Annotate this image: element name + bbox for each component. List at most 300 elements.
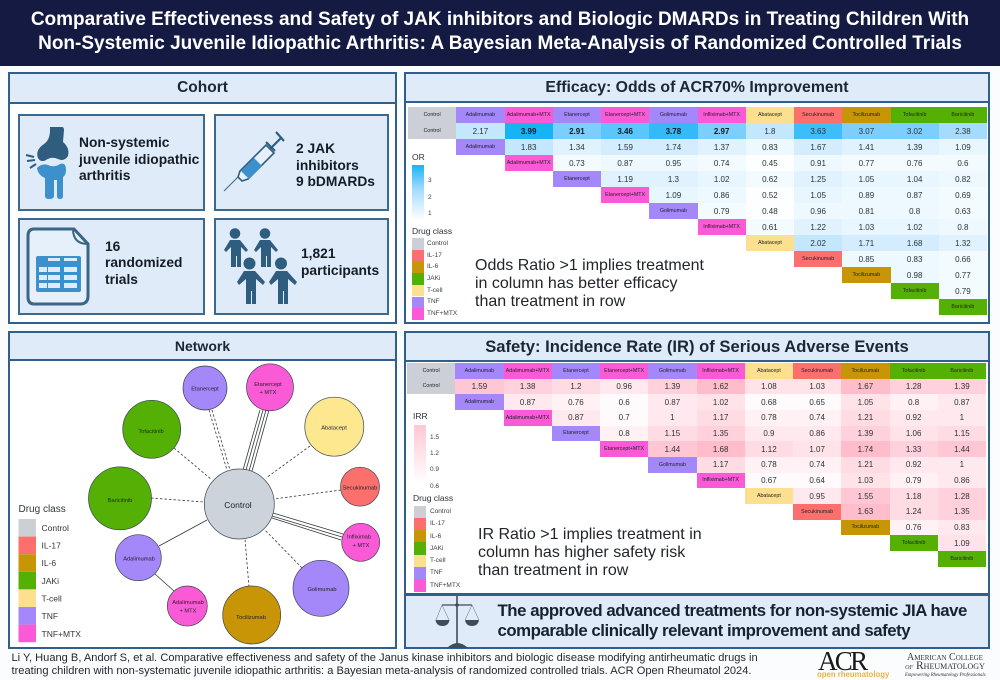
node: etanercept + MTX <box>246 364 294 411</box>
safety league table: 0.74 <box>809 460 825 469</box>
efficacy league table: 1.34 <box>569 142 585 152</box>
efficacy league table: 0.6 <box>957 158 968 168</box>
safety league table: 1.21 <box>858 413 873 422</box>
safety league table: 1.28 <box>954 492 970 501</box>
logo: ACR Open Rheumatology <box>817 646 890 679</box>
node: etanercept <box>183 366 227 410</box>
panel: safety <box>404 331 990 595</box>
safety league table: 1.17 <box>713 413 728 422</box>
safety league table: Baricitinib <box>950 556 973 562</box>
efficacy league table: 1.03 <box>859 222 874 232</box>
legend: network drug class: IL-6 <box>42 558 56 568</box>
efficacy league table: 2.38 <box>955 126 971 136</box>
safety league table: Tofacitinib <box>902 368 925 374</box>
efficacy league table: Etanercept+MTX <box>605 112 645 118</box>
efficacy league table: 0.89 <box>859 190 874 200</box>
efficacy league table: Infliximab+MTX <box>703 224 740 230</box>
node: infliximab + MTX: Infliximab <box>347 534 371 540</box>
label: participants: 1,821 <box>301 246 336 261</box>
conclusion text: comparable clinically relevant improvement and safety <box>498 620 910 640</box>
safety league table: 0.87 <box>568 413 584 422</box>
safety league table: 0.68 <box>761 398 777 407</box>
efficacy league table: 1.59 <box>617 142 633 152</box>
efficacy league table: Tocilizumab <box>853 272 880 278</box>
safety league table: 1 <box>960 460 964 469</box>
safety league table: 1.24 <box>906 507 921 516</box>
safety league table: Golimumab <box>659 368 686 374</box>
edges <box>151 410 343 591</box>
efficacy league table: Golimumab <box>660 112 687 118</box>
safety league table: 1.39 <box>665 382 680 391</box>
node: secukinumab <box>340 467 380 506</box>
efficacy league table: 0.77 <box>859 158 874 168</box>
safety league table: 0.9 <box>763 429 774 438</box>
heading: cohort <box>10 74 395 104</box>
efficacy league table: Baricitinib <box>951 112 974 118</box>
logo: American College of Rheumatology: Empowering Rheumatology Professionals <box>905 672 986 678</box>
note: odds ratio: Odds Ratio >1 implies treatment <box>475 257 704 274</box>
label: drugs <box>296 141 375 189</box>
note: IR ratio: than treatment in row <box>478 562 628 579</box>
icon: syringe <box>224 131 285 192</box>
label: participants: participants <box>301 263 379 278</box>
safety league table: Adalimumab <box>465 399 494 405</box>
legend: OR colour scale: 1 <box>428 210 432 217</box>
safety league table: 1.05 <box>858 398 873 407</box>
safety league table: 1.21 <box>858 460 873 469</box>
efficacy league table: 1.09 <box>666 190 681 200</box>
heading: efficacy <box>406 74 988 103</box>
safety league table: 1.15 <box>665 429 680 438</box>
safety league table: 1.07 <box>809 445 825 454</box>
efficacy league table: 0.8 <box>909 206 920 216</box>
legend: efficacy drug class: Drug class <box>412 226 452 236</box>
efficacy league table: 0.8 <box>957 222 968 232</box>
logo: American College of Rheumatology: of Rheumatology <box>905 660 985 672</box>
efficacy league table: 0.62 <box>762 174 778 184</box>
efficacy league table: 2.97 <box>714 126 729 136</box>
safety league table: 1.2 <box>570 382 581 391</box>
citation: treating children with non-systematic juvenile idiopathic arthritis: a Bayesian meta-analysis of randomized controlled trials. ACR Open Rheumatol 2024. <box>12 665 751 677</box>
node: adalimumab: Adalimumab <box>123 556 155 562</box>
node: golimumab: Golimumab <box>307 587 337 593</box>
safety league table: 0.65 <box>809 398 825 407</box>
node: secukinumab: Secukinumab <box>343 486 377 492</box>
panel: cohort <box>8 72 397 324</box>
efficacy league table: 1.37 <box>714 142 729 152</box>
legend: safety drug class: TNF+MTX <box>430 582 460 588</box>
efficacy league table: 3.46 <box>617 126 633 136</box>
legend: safety drug class: JAKi <box>430 544 443 552</box>
efficacy league table: 0.95 <box>666 158 681 168</box>
efficacy league table: 2.02 <box>810 238 826 248</box>
conclusion text: The approved advanced treatments for non-systemic JIA have <box>498 601 967 620</box>
safety league table: 0.78 <box>761 460 777 469</box>
efficacy league table: Etanercept+MTX <box>605 192 645 198</box>
efficacy league table: Etanercept <box>564 112 590 118</box>
node: etanercept: Etanercept <box>191 386 219 392</box>
efficacy league table: 1.25 <box>810 174 826 184</box>
node: adalimumab + MTX: + MTX <box>180 608 197 614</box>
safety league table: 0.6 <box>619 398 630 407</box>
safety league table: 1.02 <box>713 398 728 407</box>
safety league table: 1.67 <box>858 382 873 391</box>
panel: network <box>8 331 397 649</box>
efficacy league table: 0.85 <box>859 254 874 264</box>
efficacy league table: Abatacept <box>758 112 782 118</box>
label: drugs: inhibitors <box>296 158 359 173</box>
panel: conclusion <box>404 594 990 649</box>
label: disease <box>78 135 199 183</box>
safety league table: Etanercept <box>563 430 589 436</box>
safety league table: 1.44 <box>954 445 970 454</box>
safety league table: 0.87 <box>665 398 680 407</box>
label: disease: juvenile idiopathic <box>79 152 199 167</box>
safety league table: 0.79 <box>906 476 921 485</box>
node: infliximab + MTX: + MTX <box>353 543 370 549</box>
icon: document table <box>26 228 90 306</box>
legend: efficacy drug class: IL-17 <box>427 252 442 258</box>
efficacy league table: 0.91 <box>810 158 826 168</box>
legend: network drug class: TNF <box>42 611 58 621</box>
efficacy league table: 0.73 <box>569 158 585 168</box>
legend: efficacy drug class: TNF+MTX <box>427 310 457 317</box>
safety league table: 1.44 <box>665 445 680 454</box>
heading: network: Network <box>175 338 230 354</box>
safety league table: 0.8 <box>619 429 630 438</box>
node: infliximab + MTX <box>342 523 380 561</box>
safety league table: 1.08 <box>761 382 777 391</box>
efficacy league table: 0.98 <box>907 270 922 280</box>
node: baricitinib: Baricitinib <box>108 498 132 504</box>
safety league table: Etanercept+MTX <box>604 368 644 374</box>
efficacy league table: 1.41 <box>859 142 874 152</box>
conclusion text <box>498 601 967 640</box>
efficacy league table: 0.63 <box>955 206 971 216</box>
efficacy league table <box>408 107 987 315</box>
note: IR ratio: IR Ratio >1 implies treatment in <box>478 526 702 543</box>
safety league table: 0.87 <box>520 398 535 407</box>
node: tofacitinib: Tofacitinib <box>138 429 164 435</box>
efficacy league table: Etanercept <box>564 176 590 182</box>
safety league table: 1 <box>960 413 964 422</box>
efficacy league table: 1.04 <box>907 174 922 184</box>
heading: safety <box>406 333 988 362</box>
safety league table: Tocilizumab <box>852 368 879 374</box>
citation <box>12 652 758 677</box>
legend: efficacy drug class: T-cell <box>427 286 443 294</box>
safety league table: 0.64 <box>809 476 825 485</box>
safety league table: 1.09 <box>954 539 970 548</box>
safety league table: 1.63 <box>858 507 873 516</box>
safety league table: Infliximab+MTX <box>702 368 739 374</box>
safety league table: 0.92 <box>906 460 921 469</box>
card: trials <box>18 218 205 315</box>
efficacy league table: 1.8 <box>764 126 775 136</box>
label: participants <box>301 246 379 278</box>
node: etanercept + MTX: Etanercept <box>254 382 282 388</box>
safety league table: Abatacept <box>757 493 781 499</box>
node: adalimumab + MTX <box>167 586 207 626</box>
safety league table: Secukinumab <box>801 509 833 515</box>
node: etanercept + MTX: + MTX <box>260 390 277 396</box>
efficacy league table: Abatacept <box>758 240 782 246</box>
efficacy league table: 1.3 <box>668 174 679 184</box>
efficacy league table: Baricitinib <box>951 304 974 310</box>
legend: OR colour scale <box>412 152 432 218</box>
node: tocilizumab <box>223 586 281 644</box>
legend: network drug class <box>18 504 81 642</box>
safety league table: 0.95 <box>809 492 825 501</box>
efficacy league table: 0.74 <box>714 158 729 168</box>
efficacy league table: 1.02 <box>714 174 729 184</box>
safety league table: Abatacept <box>757 368 781 374</box>
efficacy league table: 0.45 <box>762 158 778 168</box>
efficacy league table: Tofacitinib <box>903 112 926 118</box>
legend: network drug class: Control <box>42 523 69 533</box>
efficacy league table: 1.32 <box>955 238 971 248</box>
label: drugs: 2 JAK <box>296 141 335 156</box>
efficacy league table: 0.86 <box>714 190 729 200</box>
safety league table: 1.62 <box>713 382 728 391</box>
label: trials: 16 <box>105 238 120 254</box>
safety league table: 1.28 <box>906 382 921 391</box>
efficacy league table: 0.96 <box>810 206 826 216</box>
node: tocilizumab: Tocilizumab <box>236 615 266 621</box>
efficacy league table: 0.79 <box>714 206 729 216</box>
safety league table: Adalimumab+MTX <box>506 368 549 374</box>
logo: ACR Open Rheumatology: ACR <box>818 646 865 676</box>
safety league table: Etanercept+MTX <box>604 446 644 452</box>
efficacy league table: 1.05 <box>810 190 826 200</box>
panel: efficacy <box>404 72 990 324</box>
legend: OR colour scale: 2 <box>428 194 432 201</box>
safety league table: 0.78 <box>761 413 777 422</box>
efficacy league table: 1.67 <box>810 142 826 152</box>
safety league table: Tocilizumab <box>852 524 879 530</box>
efficacy league table: 1.74 <box>666 142 681 152</box>
efficacy league table: 0.77 <box>955 270 971 280</box>
safety league table: 0.83 <box>954 523 970 532</box>
label: drugs: 9 bDMARDs <box>296 174 375 189</box>
node: abatacept <box>305 397 364 456</box>
label: disease: Non-systemic <box>79 135 169 150</box>
heading: network <box>10 333 395 361</box>
safety league table: 0.7 <box>619 413 630 422</box>
icon: people <box>224 228 297 304</box>
legend: IRR colour scale: 1.5 <box>430 434 439 441</box>
legend: IRR colour scale: 0.9 <box>430 466 439 473</box>
efficacy league table: 0.76 <box>907 158 922 168</box>
legend: OR colour scale: 3 <box>428 177 432 184</box>
efficacy league table: Control <box>424 112 441 118</box>
legend: network drug class: IL-17 <box>42 540 61 550</box>
legend: network drug class: TNF+MTX <box>42 629 81 639</box>
legend: safety drug class: IL-17 <box>430 520 445 527</box>
note: IR ratio <box>478 526 702 579</box>
safety league table: 1.35 <box>713 429 728 438</box>
title banner: Comparative Effectiveness and Safety of JAK inhibitors and Biologic DMARDs in Treating Children With <box>31 9 969 30</box>
node: golimumab <box>293 560 349 616</box>
card: drugs <box>214 114 389 211</box>
legend: safety drug class: Control <box>430 508 451 515</box>
efficacy league table: 2.17 <box>473 126 488 136</box>
efficacy league table: 3.63 <box>810 126 826 136</box>
heading: cohort: Cohort <box>177 79 228 96</box>
logo: American College of Rheumatology: American College <box>907 652 983 662</box>
efficacy league table: 1.39 <box>907 142 922 152</box>
efficacy league table: 3.07 <box>859 126 874 136</box>
safety league table: 0.76 <box>568 398 584 407</box>
title banner: Non-Systemic Juvenile Idiopathic Arthritis: A Bayesian Meta-Analysis of Randomized Controlled Trials <box>38 33 962 54</box>
efficacy league table: Tocilizumab <box>853 112 880 118</box>
legend: IRR colour scale: IRR <box>413 411 428 421</box>
icon: balance scale <box>436 596 480 648</box>
safety league table: 1.03 <box>858 476 873 485</box>
safety league table: 0.8 <box>908 398 919 407</box>
safety league table: 1.68 <box>713 445 728 454</box>
efficacy league table: 1.71 <box>859 238 874 248</box>
safety league table: 1.35 <box>954 507 970 516</box>
legend: IRR colour scale <box>413 411 439 490</box>
legend: safety drug class <box>413 493 460 592</box>
efficacy league table: Secukinumab <box>802 112 834 118</box>
safety league table: 1.17 <box>713 460 728 469</box>
label: trials: trials <box>105 272 138 287</box>
node: tofacitinib <box>123 400 181 458</box>
efficacy league table: 0.61 <box>762 222 778 232</box>
safety league table: Etanercept <box>563 368 589 374</box>
label: trials <box>105 238 182 287</box>
efficacy league table: 0.82 <box>955 174 971 184</box>
safety league table: 1.39 <box>954 382 970 391</box>
safety league table: 0.74 <box>809 413 825 422</box>
safety league table: 1.39 <box>858 429 873 438</box>
safety league table: 0.87 <box>954 398 970 407</box>
efficacy league table: Tofacitinib <box>903 288 926 294</box>
safety league table: 1.74 <box>858 445 873 454</box>
safety league table: Golimumab <box>659 462 686 468</box>
efficacy league table: 0.83 <box>762 142 778 152</box>
safety league table: 0.76 <box>906 523 921 532</box>
node: control <box>204 469 274 539</box>
legend: safety drug class: T-cell <box>430 557 446 564</box>
safety league table: Control <box>423 383 440 389</box>
heading: efficacy: Efficacy: Odds of ACR70% Improvement <box>545 79 849 96</box>
efficacy league table: 1.68 <box>907 238 922 248</box>
safety league table: Adalimumab <box>465 368 494 374</box>
safety league table: 0.92 <box>906 413 921 422</box>
efficacy league table: 3.78 <box>666 126 681 136</box>
efficacy league table: 2.91 <box>569 126 585 136</box>
node: baricitinib <box>88 467 152 530</box>
note: odds ratio <box>475 257 704 310</box>
icon: knee joint <box>26 127 68 199</box>
legend: network drug class: T-cell <box>42 594 62 604</box>
legend: efficacy drug class: TNF <box>427 298 440 305</box>
safety league table: Tofacitinib <box>902 540 925 546</box>
citation: Li Y, Huang B, Andorf S, et al. Comparative effectiveness and safety of the Janus kinase inhibitors and biologic disease modifying antirheumatic drugs in <box>12 652 758 664</box>
legend: efficacy drug class <box>412 226 457 320</box>
legend: safety drug class: Drug class <box>413 493 453 503</box>
legend: safety drug class: IL-6 <box>430 532 441 540</box>
legend: IRR colour scale: 0.6 <box>430 483 439 490</box>
efficacy league table: Infliximab+MTX <box>703 112 740 118</box>
safety league table <box>407 363 986 567</box>
safety league table: 0.86 <box>809 429 825 438</box>
efficacy league table: 3.02 <box>907 126 922 136</box>
efficacy league table: 1.19 <box>617 174 633 184</box>
safety league table: Control <box>423 368 440 374</box>
efficacy league table: Golimumab <box>660 208 687 214</box>
card: disease <box>18 114 205 211</box>
efficacy league table: Control <box>424 128 441 134</box>
safety league table: 1.55 <box>858 492 873 501</box>
legend: efficacy drug class: IL-6 <box>427 263 438 270</box>
efficacy league table: Secukinumab <box>802 256 834 262</box>
efficacy league table: 0.66 <box>955 254 971 264</box>
safety league table: 0.96 <box>616 382 632 391</box>
efficacy league table: 1.83 <box>521 142 536 152</box>
node: control: Control <box>224 500 252 510</box>
efficacy league table: 3.99 <box>521 126 536 136</box>
heading: safety: Safety: Incidence Rate (IR) of Serious Adverse Events <box>485 337 909 356</box>
safety league table: 1.33 <box>906 445 921 454</box>
safety league table: Infliximab+MTX <box>702 477 739 483</box>
efficacy league table: 0.83 <box>907 254 922 264</box>
efficacy league table: 0.79 <box>955 286 971 296</box>
efficacy league table: Adalimumab+MTX <box>507 112 550 118</box>
safety league table: Secukinumab <box>801 368 833 374</box>
efficacy league table: Adalimumab+MTX <box>507 160 550 166</box>
legend: network drug class: JAKi <box>42 576 59 586</box>
safety league table: 1 <box>670 413 675 422</box>
label: disease: arthritis <box>79 168 130 183</box>
card: participants <box>214 218 389 315</box>
safety league table: 1.38 <box>520 382 535 391</box>
legend: efficacy drug class: JAKi <box>427 275 440 282</box>
note: IR ratio: column has higher safety risk <box>478 544 685 561</box>
title banner <box>0 0 1000 66</box>
safety league table: 0.67 <box>761 476 777 485</box>
efficacy league table: Adalimumab <box>466 144 495 150</box>
efficacy league table: 1.02 <box>907 222 922 232</box>
efficacy league table: 0.87 <box>617 158 633 168</box>
node: abatacept: Abatacept <box>321 426 347 432</box>
efficacy league table: 0.52 <box>762 190 778 200</box>
efficacy league table: Adalimumab <box>466 112 495 118</box>
note: odds ratio: in column has better efficacy <box>475 275 677 292</box>
safety league table: 1.03 <box>809 382 825 391</box>
efficacy league table: 0.48 <box>762 206 778 216</box>
legend: OR colour scale: OR <box>412 152 425 162</box>
note: odds ratio: than treatment in row <box>475 293 625 310</box>
efficacy league table: 1.05 <box>859 174 874 184</box>
node: adalimumab <box>115 535 161 581</box>
safety league table: 1.12 <box>761 445 777 454</box>
legend: IRR colour scale: 1.2 <box>430 450 439 457</box>
efficacy league table: 1.09 <box>955 142 971 152</box>
legend: network drug class: Drug class <box>18 504 66 515</box>
logo: American College of Rheumatology <box>905 652 986 678</box>
efficacy league table: 0.87 <box>907 190 922 200</box>
safety league table: Adalimumab+MTX <box>506 415 549 421</box>
safety league table: 1.15 <box>954 429 970 438</box>
safety league table: 0.86 <box>954 476 970 485</box>
label: trials: randomized <box>105 255 182 270</box>
efficacy league table: 0.81 <box>859 206 874 216</box>
node: adalimumab + MTX: Adalimumab <box>172 600 204 606</box>
